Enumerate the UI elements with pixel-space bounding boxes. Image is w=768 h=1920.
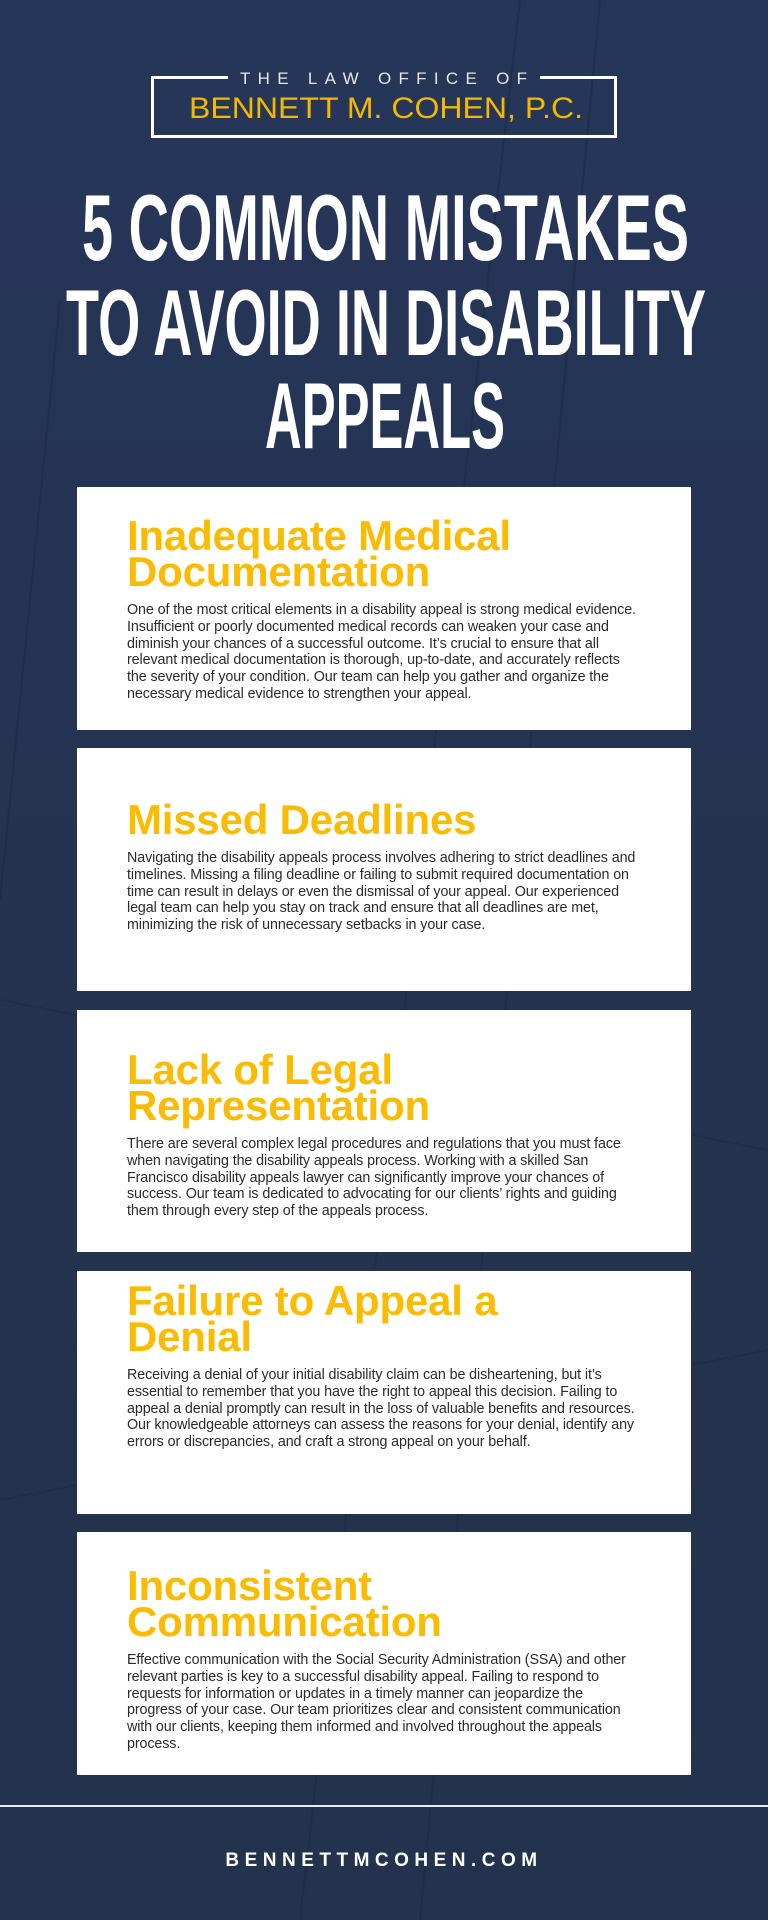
logo: BENNETT M. COHEN, P.C. — [189, 92, 583, 125]
heading — [127, 1277, 498, 1360]
body text: requests for information or updates in a timely manner can jeopardize the — [127, 1686, 583, 1702]
body text: Francisco disability appeals lawyer can significantly improve your chances of — [127, 1170, 604, 1186]
title — [66, 175, 706, 468]
body text: diminish your chances of a successful outcome. It’s crucial to ensure that all — [127, 636, 599, 652]
panel: failure to appeal a denial — [77, 1271, 691, 1514]
heading — [127, 512, 511, 595]
body text: Effective communication with the Social Security Administration (SSA) and other — [127, 1652, 626, 1668]
body text: them through every step of the appeals process. — [127, 1203, 428, 1219]
heading — [127, 1046, 430, 1129]
heading: Failure to Appeal a — [127, 1277, 497, 1324]
body text — [127, 1367, 634, 1450]
body text — [127, 1136, 621, 1219]
panel: lack of legal representation — [77, 1010, 691, 1252]
body text: time can result in delays or even the dismissal of your appeal. Our experienced — [127, 884, 619, 900]
body text: when navigating the disability appeals process. Working with a skilled San — [127, 1153, 588, 1169]
body text — [127, 602, 636, 702]
body text: process. — [127, 1736, 180, 1752]
heading: Documentation — [127, 548, 430, 595]
body text: errors or discrepancies, and craft a strong appeal on your behalf. — [127, 1434, 530, 1450]
body text: One of the most critical elements in a disability appeal is strong medical evidence. — [127, 602, 636, 618]
logo — [151, 69, 617, 138]
body text: relevant parties is key to a successful disability appeal. Failing to respond to — [127, 1669, 599, 1685]
heading: Denial — [127, 1313, 252, 1360]
body text: with our clients, keeping them informed and involved throughout the appeals — [127, 1719, 602, 1735]
body text — [127, 850, 635, 933]
body text: legal team can help you stay on track and ensure that all deadlines are met, — [127, 900, 599, 916]
body text: minimizing the risk of unnecessary setbacks in your case. — [127, 917, 485, 933]
heading — [127, 1562, 442, 1645]
body text: essential to remember that you have the right to appeal this decision. Failing to — [127, 1384, 617, 1400]
body text: appeal a denial promptly can result in the loss of valuable benefits and resources. — [127, 1401, 634, 1417]
heading: Representation — [127, 1082, 430, 1129]
heading: Inconsistent — [127, 1562, 372, 1609]
panel: inconsistent communication — [77, 1532, 691, 1775]
logo: THE LAW OFFICE OF — [240, 69, 527, 88]
body text: timelines. Missing a filing deadline or failing to submit required documentation on — [127, 867, 629, 883]
heading: Missed Deadlines — [127, 796, 476, 843]
body text: There are several complex legal procedures and regulations that you must face — [127, 1136, 621, 1152]
body text: the severity of your condition. Our team can help you gather and organize the — [127, 669, 609, 685]
title: APPEALS — [265, 363, 505, 468]
body text: success. Our team is dedicated to advocating for our clients’ rights and guiding — [127, 1186, 617, 1202]
panel: inadequate medical documentation — [77, 487, 691, 730]
body text — [127, 1652, 626, 1752]
body text: relevant medical documentation is thorough, up-to-date, and accurately reflects — [127, 652, 620, 668]
body text: Insufficient or poorly documented medical records can weaken your case and — [127, 619, 609, 635]
body text: Navigating the disability appeals process involves adhering to strict deadlines and — [127, 850, 635, 866]
body text: Receiving a denial of your initial disability claim can be disheartening, but it’s — [127, 1367, 602, 1383]
body text: necessary medical evidence to strengthen your appeal. — [127, 686, 471, 702]
panel: missed deadlines — [77, 748, 691, 991]
body text: progress of your case. Our team prioritizes clear and consistent communication — [127, 1702, 621, 1718]
footer website: BENNETTMCOHEN.COM — [225, 1850, 543, 1871]
heading: Communication — [127, 1598, 442, 1645]
heading: Inadequate Medical — [127, 512, 511, 559]
heading: Lack of Legal — [127, 1046, 393, 1093]
body text: Our knowledgeable attorneys can assess the reasons for your denial, identify any — [127, 1417, 634, 1433]
